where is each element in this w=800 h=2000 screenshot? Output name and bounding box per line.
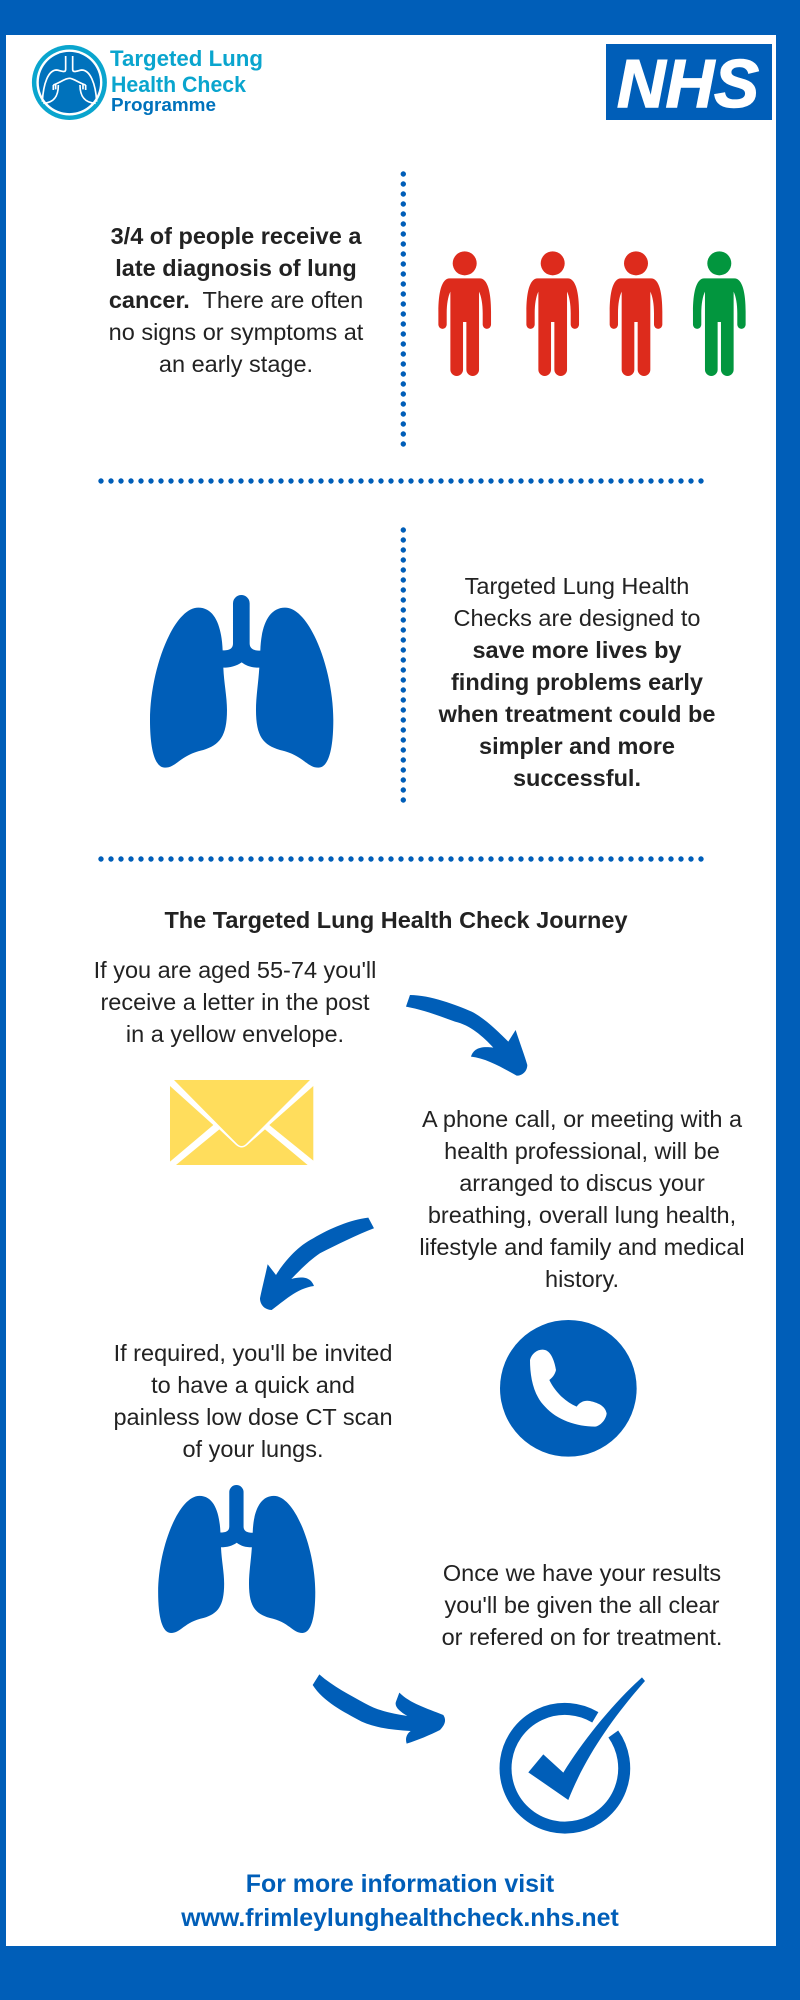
- text: step 2 phone call: arranged to discus your: [459, 1170, 705, 1196]
- horizontal dotted divider 2: [101, 856, 703, 862]
- text: purpose of health checks: [438, 573, 715, 791]
- footer: more information: [180, 1870, 619, 1932]
- text: step 4 results: Once we have your results: [443, 1560, 721, 1586]
- text: purpose of health checks: successful.: [513, 765, 641, 791]
- text: purpose of health checks: simpler and more: [479, 733, 675, 759]
- text: step 3 CT scan: of your lungs.: [182, 1436, 324, 1462]
- vertical dotted divider 2: [401, 530, 406, 802]
- icon: telephone: [500, 1320, 637, 1457]
- logo wordmark: Programme: [111, 95, 216, 115]
- logo wordmark: [110, 46, 263, 115]
- icon: small lungs: [158, 1485, 315, 1633]
- text: purpose of health checks: Targeted Lung Health: [465, 573, 689, 599]
- text: step 2 phone call: breathing, overall lung health,: [428, 1202, 736, 1228]
- footer: more information: For more information visit: [246, 1870, 554, 1898]
- text: late diagnosis statistic: cancer. There are often: [109, 287, 363, 313]
- text: late diagnosis statistic: an early stage.: [159, 351, 313, 377]
- text: step 1 letter: If you are aged 55-74 you'll: [94, 957, 376, 983]
- text: late diagnosis statistic: [109, 223, 364, 377]
- logo wordmark: Targeted Lung: [110, 46, 263, 71]
- icon: person green: [693, 251, 746, 376]
- text: step 2 phone call: [419, 1106, 745, 1292]
- text: step 3 CT scan: painless low dose CT scan: [113, 1404, 393, 1430]
- text: purpose of health checks: save more lives by: [472, 637, 682, 663]
- logo: Targeted Lung Health Check Programme: [32, 45, 263, 120]
- footer: more information: www.frimleylunghealthcheck.nhs.net: [180, 1904, 619, 1932]
- text: step 2 phone call: health professional, will be: [444, 1138, 720, 1164]
- text: purpose of health checks: Checks are designed to: [454, 605, 700, 631]
- text: late diagnosis statistic: 3/4 of people receive a: [111, 223, 362, 249]
- icon: yellow envelope: [170, 1080, 313, 1165]
- text: step 1 letter: [94, 957, 376, 1047]
- arrow: step 1 to step 2: [406, 995, 527, 1076]
- icon: large lungs: [150, 595, 333, 768]
- text: step 4 results: or refered on for treatment.: [442, 1624, 722, 1650]
- icon: person red 3: [610, 251, 662, 376]
- text: step 2 phone call: A phone call, or meeting with a: [422, 1106, 743, 1132]
- text: late diagnosis statistic: no signs or symptoms at: [109, 319, 364, 345]
- icon: person red 2: [526, 251, 579, 376]
- text: step 2 phone call: history.: [545, 1266, 619, 1292]
- heading: journey: The Targeted Lung Health Check Journey: [164, 907, 628, 933]
- text: step 3 CT scan: If required, you'll be invited: [114, 1340, 392, 1366]
- vertical dotted divider 1: [401, 174, 406, 446]
- logo: NHS: NHS: [617, 46, 759, 122]
- icon: person red 1: [438, 251, 491, 376]
- text: step 1 letter: receive a letter in the post: [100, 989, 370, 1015]
- text: purpose of health checks: when treatment could be: [438, 701, 715, 727]
- text: step 1 letter: in a yellow envelope.: [126, 1021, 344, 1047]
- icon: check mark in circle: [506, 1677, 645, 1828]
- logo wordmark: Health Check: [111, 72, 247, 97]
- arrow: step 2 to step 3: [260, 1218, 374, 1310]
- pictogram: three in four people: [438, 251, 746, 376]
- text: late diagnosis statistic: late diagnosis of lung: [115, 255, 357, 281]
- icon: logo lungs roundel: [32, 45, 107, 120]
- text: step 3 CT scan: [113, 1340, 393, 1462]
- arrow: step 3 to step 4: [313, 1674, 445, 1744]
- text: step 4 results: [442, 1560, 722, 1650]
- text: step 2 phone call: lifestyle and family and medical: [419, 1234, 745, 1260]
- horizontal dotted divider 1: [101, 478, 703, 484]
- text: step 4 results: you'll be given the all clear: [445, 1592, 720, 1618]
- text: step 3 CT scan: to have a quick and: [151, 1372, 355, 1398]
- text: purpose of health checks: finding problems early: [451, 669, 703, 695]
